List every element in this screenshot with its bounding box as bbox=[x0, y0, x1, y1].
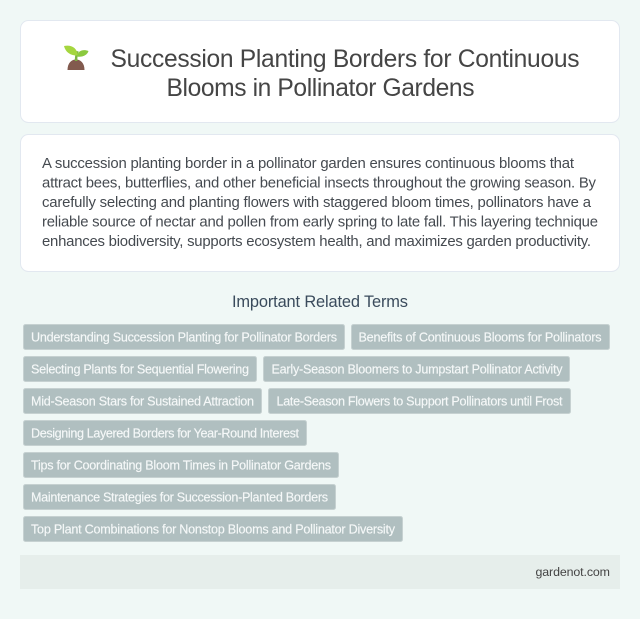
chip: maintenance strategies: Maintenance Strategies for Succession-Planted Borders bbox=[31, 490, 328, 504]
chip: designing layered borders: Designing Layered Borders for Year-Round Interest bbox=[31, 426, 300, 440]
chip: tips for coordinating bbox=[24, 452, 338, 478]
text block: description: reliable source of nectar and pollen from early spring to late fall. This layering technique bbox=[42, 214, 598, 230]
chip: early-season bloomers: Early-Season Bloomers to Jumpstart Pollinator Activity bbox=[272, 362, 563, 376]
text block: description: A succession planting border in a pollinator garden ensures continuous blooms that bbox=[42, 156, 575, 172]
chip: maintenance strategies bbox=[24, 484, 336, 510]
icon: sprout bbox=[64, 46, 88, 70]
title: Blooms in Pollinator Gardens bbox=[166, 75, 474, 102]
chip: understanding succession planting bbox=[24, 324, 344, 350]
chip: benefits of continuous blooms: Benefits of Continuous Blooms for Pollinators bbox=[358, 330, 602, 344]
chip: mid-season stars: Mid-Season Stars for Sustained Attraction bbox=[31, 394, 254, 408]
heading: related terms: Important Related Terms bbox=[232, 293, 408, 311]
title bbox=[110, 46, 580, 102]
chip: understanding succession planting: Understanding Succession Planting for Pollinator Borders bbox=[31, 330, 337, 344]
text block: description: attract bees, butterflies, and other beneficial insects throughout the growing season. By bbox=[42, 176, 597, 192]
chip: top plant combinations bbox=[24, 516, 402, 542]
chip: early-season bloomers bbox=[264, 356, 570, 382]
chip: top plant combinations: Top Plant Combinations for Nonstop Blooms and Pollinator Diversity bbox=[31, 522, 396, 536]
chip: designing layered borders bbox=[24, 420, 306, 446]
chip: mid-season stars bbox=[24, 388, 262, 414]
text block: description: carefully selecting and planting flowers with staggered bloom times, pollinators have a bbox=[42, 195, 592, 211]
chip: benefits of continuous blooms bbox=[352, 324, 610, 350]
chip: selecting plants: Selecting Plants for Sequential Flowering bbox=[31, 362, 249, 376]
chip: tips for coordinating: Tips for Coordinating Bloom Times in Pollinator Gardens bbox=[31, 458, 331, 472]
chip: late-season flowers: Late-Season Flowers to Support Pollinators until Frost bbox=[276, 394, 563, 408]
title: Succession Planting Borders for Continuous bbox=[110, 46, 580, 73]
chip: late-season flowers bbox=[268, 388, 570, 414]
text block: description: enhances biodiversity, supports ecosystem health, and maximizes garden productivity. bbox=[42, 234, 591, 250]
footer: gardenot.com bbox=[536, 565, 610, 579]
panel: description card bbox=[20, 134, 620, 272]
text block: description bbox=[42, 156, 598, 250]
footer bbox=[20, 555, 620, 589]
panel: title card bbox=[20, 20, 620, 122]
chip: selecting plants bbox=[24, 356, 256, 382]
